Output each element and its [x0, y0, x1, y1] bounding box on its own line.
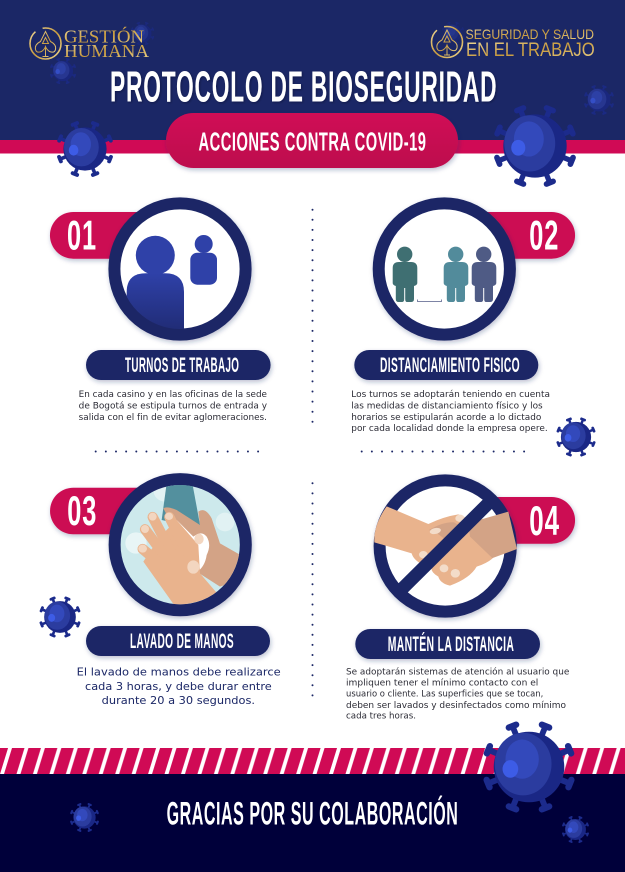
text block: cada 3 horas, y debe durar entre — [85, 681, 272, 693]
vertical dotted divider top — [312, 210, 314, 423]
text block: Se adoptarán sistemas de atención al usuario que — [346, 666, 569, 676]
heading pill — [355, 629, 540, 659]
icon: no handshake — [374, 480, 517, 612]
icon: two people in circle — [114, 203, 246, 335]
number badge 04 — [480, 497, 575, 544]
number badge 01: 01 — [67, 211, 97, 258]
heading pill: TURNOS DE TRABAJO — [125, 354, 239, 377]
icon: faded virus upper right — [585, 86, 613, 114]
horizontal dotted divider right — [362, 450, 525, 452]
heading pill: LAVADO DE MANOS — [130, 630, 234, 653]
text block — [77, 667, 281, 707]
number badge 02: 02 — [529, 211, 559, 258]
logo: Gestión Humana: GESTIÓN — [64, 25, 144, 46]
text block: las medidas de distanciamiento físico y los — [351, 400, 543, 410]
text block: deben ser lavados y desinfectados como mínimo — [346, 700, 566, 710]
heading pill — [354, 350, 538, 380]
text block — [351, 389, 550, 433]
text block: En cada casino y en las oficinas de la sede — [79, 389, 267, 399]
horizontal dotted divider left — [96, 450, 259, 452]
icon: small virus — [41, 598, 79, 636]
footer band — [0, 774, 625, 872]
text block: horarios se estipularán acorde a lo dictado — [351, 412, 541, 422]
icon: virus top left — [59, 123, 111, 175]
icon: faded virus upper left — [51, 59, 75, 83]
text block: Los turnos se adoptarán teniendo en cuenta — [351, 389, 550, 399]
icon: hand washing — [115, 478, 246, 610]
icon: large virus footer — [487, 725, 571, 809]
panel: 01 turnos de trabajo — [50, 203, 271, 422]
text block: de Bogotá se estipula turnos de entrada y — [79, 400, 267, 410]
number badge 01 — [50, 211, 160, 259]
text block: salida con el fin de evitar aglomeraciones. — [79, 412, 267, 422]
header band — [0, 0, 625, 154]
icon: small virus — [558, 419, 594, 455]
logo: Gestión Humana — [30, 25, 149, 61]
icon: faded virus behind right logo — [443, 23, 463, 43]
text block — [79, 389, 267, 422]
striped band — [0, 748, 625, 774]
text block: impliquen tener el mínimo contacto con el — [346, 678, 538, 688]
vertical dotted divider bottom — [312, 483, 314, 696]
text block: El lavado de manos debe realizarce — [77, 667, 281, 679]
text block: durante 20 a 30 segundos. — [102, 695, 255, 707]
panel: 02 distanciamiento fisico — [351, 203, 594, 455]
icon: people keeping distance — [379, 203, 510, 335]
logo: Gestión Humana: HUMANA — [64, 41, 149, 61]
logo: Seguridad y Salud en el Trabajo: SEGURIDAD Y SALUD — [466, 26, 594, 42]
heading pill — [86, 350, 271, 380]
panel: 03 lavado de manos — [41, 478, 281, 707]
heading pill — [86, 626, 270, 656]
text block: por cada localidad donde la empresa opere. — [351, 423, 548, 433]
number badge 03 — [50, 487, 160, 534]
logo: Seguridad y Salud en el Trabajo — [432, 26, 595, 61]
number badge 02 — [480, 211, 575, 259]
subtitle pill — [166, 113, 458, 168]
number badge 04: 04 — [529, 497, 560, 544]
text block: usuario o cliente. Las superficies que se tocan, — [346, 689, 543, 699]
text block: cada tres horas. — [346, 711, 416, 721]
icon: virus footer left — [71, 804, 98, 831]
icon: faded virus behind logo — [132, 23, 153, 44]
logo: Seguridad y Salud en el Trabajo: EN EL TRABAJO — [466, 40, 595, 61]
panel: 04 manten la distancia — [346, 480, 575, 721]
text block — [346, 666, 569, 721]
icon: virus footer right — [563, 817, 588, 842]
number badge 03: 03 — [67, 487, 97, 534]
subtitle pill: ACCIONES CONTRA COVID-19 — [198, 127, 426, 157]
icon: virus top right — [497, 108, 573, 184]
